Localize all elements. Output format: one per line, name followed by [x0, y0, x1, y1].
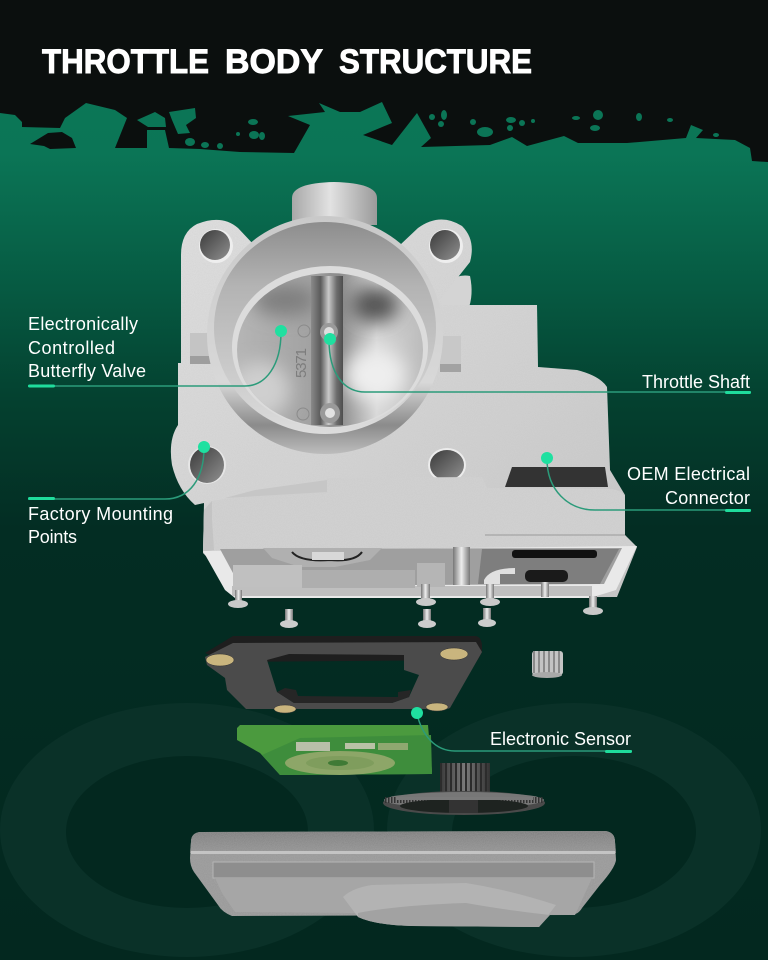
bore outer ring	[207, 216, 443, 454]
sensor traces	[285, 751, 395, 775]
torn black header band	[0, 0, 768, 162]
screws	[228, 582, 603, 628]
throttle shaft	[311, 276, 343, 425]
callout: mounting points	[28, 441, 210, 547]
gear seat	[263, 548, 382, 567]
side tabs	[190, 333, 212, 359]
callout: electronic sensor: Electronic Sensor	[490, 729, 631, 749]
upper tube	[292, 182, 377, 225]
callout: throttle shaft	[324, 333, 751, 394]
throttle body assembly	[171, 182, 637, 628]
butterfly disc	[232, 266, 428, 428]
callout: butterfly valve: Butterfly Valve	[28, 361, 146, 381]
bottom concentric rings right	[387, 703, 761, 957]
bottom concentric rings left	[0, 703, 374, 957]
callout: electrical connector: OEM Electrical	[627, 464, 750, 484]
callout: butterfly valve	[28, 314, 287, 388]
title	[42, 43, 532, 81]
torn green islands	[137, 108, 719, 149]
open housing interior	[203, 546, 637, 598]
brass inserts	[206, 648, 468, 713]
callout: throttle shaft: Throttle Shaft	[642, 372, 750, 392]
callout: butterfly valve: Controlled	[28, 338, 115, 358]
disc marking: 5371	[293, 348, 310, 378]
mounting holes	[188, 229, 466, 484]
callout: mounting points: Factory Mounting	[28, 504, 173, 524]
OEM connector	[505, 467, 608, 487]
aluminium cover	[190, 831, 616, 927]
body silver casting	[171, 219, 637, 598]
callout: butterfly valve: Electronically	[28, 314, 138, 334]
small pinion	[532, 651, 563, 678]
green circuit board	[237, 725, 432, 775]
title: STRUCTURE	[339, 43, 532, 81]
black gasket plate	[205, 636, 482, 713]
disc shading	[230, 284, 405, 418]
callout: electrical connector: Connector	[665, 488, 750, 508]
callout: electrical connector	[541, 452, 751, 512]
rear pipe	[430, 276, 472, 310]
title: THROTTLE	[42, 43, 209, 81]
electronics bay	[478, 549, 619, 584]
callout: mounting points: Points	[28, 527, 77, 547]
toothed gear	[383, 763, 545, 815]
title: BODY	[225, 43, 323, 81]
bottom base cover	[203, 477, 637, 552]
cover hump	[343, 883, 556, 927]
callout: electronic sensor	[411, 707, 632, 753]
